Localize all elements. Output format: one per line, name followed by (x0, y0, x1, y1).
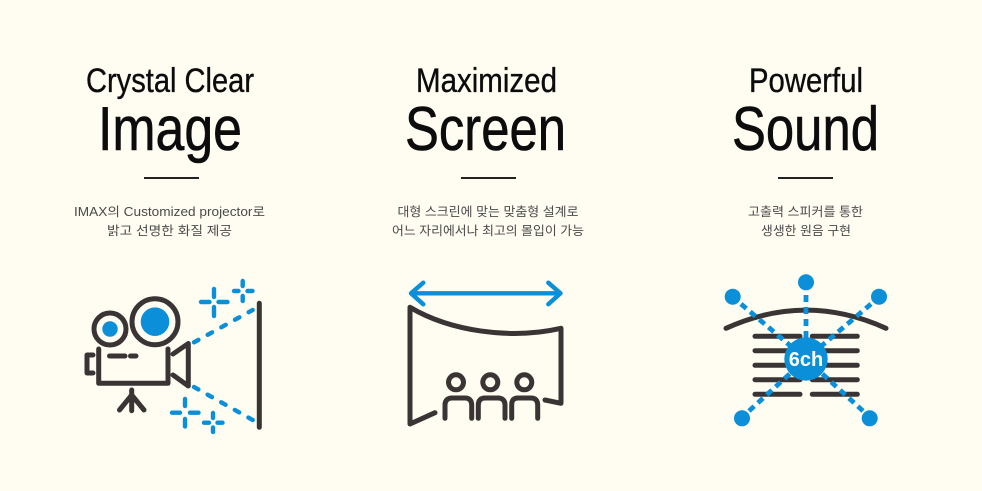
text: image description (74, 205, 265, 238)
heading: Crystal Clear Image: Image (98, 95, 242, 164)
text: image description: IMAX의 Customized projector로 (74, 205, 265, 219)
icon: six channel speakers: 6ch (789, 349, 823, 371)
text: sound description (748, 205, 864, 238)
text: screen description: 어느 자리에서나 최고의 몰입이 가능 (392, 224, 584, 238)
heading: Crystal Clear Image (86, 62, 254, 164)
text: sound description: 고출력 스피커를 통한 (748, 205, 864, 219)
heading: Powerful Sound: Powerful (749, 62, 863, 100)
panel: crystal clear image (74, 62, 265, 432)
heading: Maximized Screen: Screen (405, 95, 566, 164)
heading: Maximized Screen (405, 62, 566, 164)
heading: Maximized Screen: Maximized (416, 62, 557, 100)
panel: maximized screen (392, 62, 584, 424)
text: screen description (392, 205, 584, 238)
icon: wide screen with audience (410, 283, 561, 424)
heading: Powerful Sound: Sound (732, 95, 879, 164)
icon: six channel speakers (725, 274, 887, 426)
text: screen description: 대형 스크린에 맞는 맞춤형 설계로 (398, 205, 578, 219)
heading: Crystal Clear Image: Crystal Clear (86, 62, 254, 100)
icon: movie camera projecting (87, 281, 259, 432)
text: image description: 밝고 선명한 화질 제공 (107, 224, 232, 238)
text: sound description: 생생한 원음 구현 (761, 224, 851, 238)
heading: Powerful Sound (732, 62, 879, 164)
panel: powerful sound (725, 62, 887, 426)
